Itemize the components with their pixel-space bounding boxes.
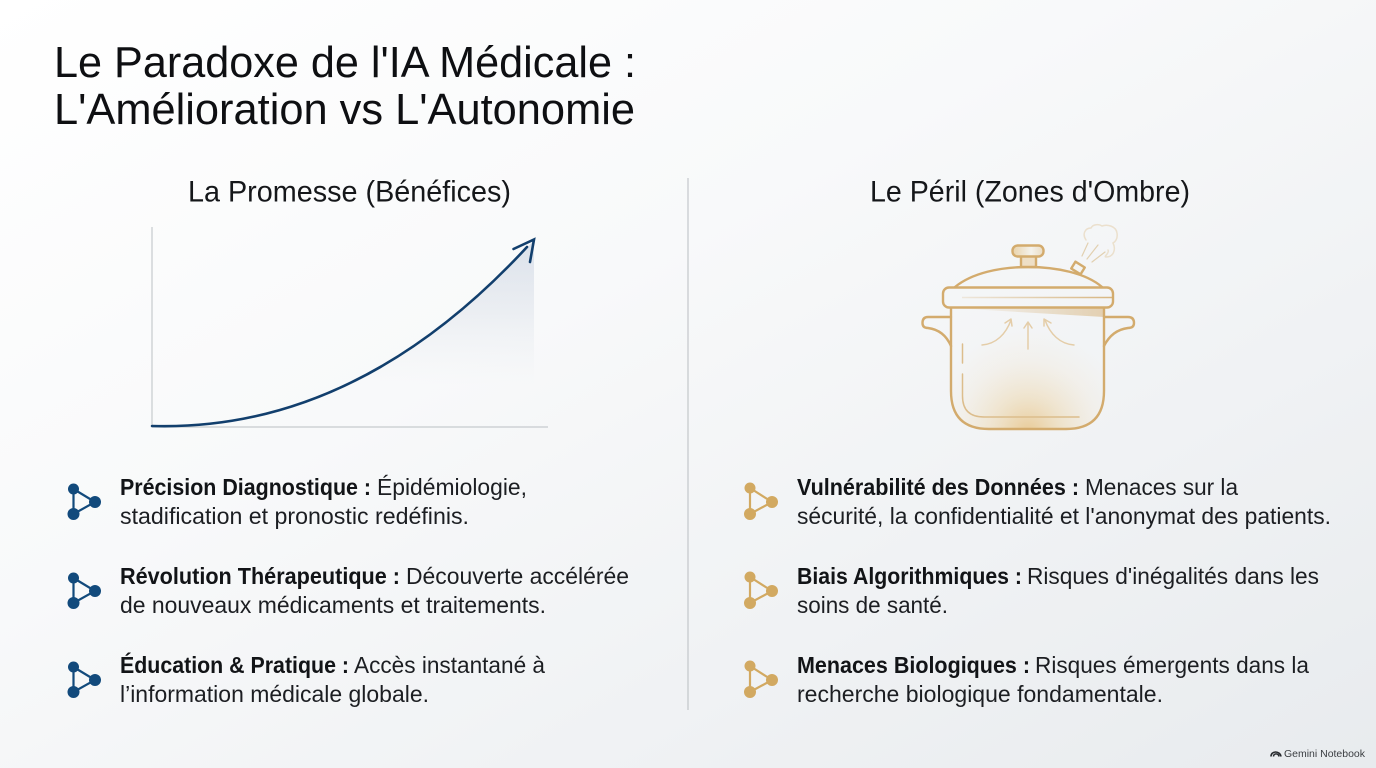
steam xyxy=(1082,225,1117,262)
item: Biais Algorithmiques xyxy=(744,563,1319,618)
text xyxy=(797,652,1309,707)
icon: network nodes xyxy=(68,572,101,609)
list: benefits xyxy=(68,474,629,707)
pot body xyxy=(951,308,1104,429)
text: l’information médicale globale. xyxy=(120,681,429,707)
item: Révolution Thérapeutique xyxy=(68,563,629,618)
item: Précision Diagnostique xyxy=(68,474,527,529)
item: Menaces Biologiques xyxy=(744,652,1309,707)
icon: Gemini Notebook logo xyxy=(1271,752,1281,756)
text xyxy=(797,563,1319,618)
text: recherche biologique fondamentale. xyxy=(797,681,1163,707)
item: Vulnérabilité des Données xyxy=(744,474,1331,529)
icon: network nodes xyxy=(68,484,101,520)
text: Biais Algorithmiques : xyxy=(797,563,1022,589)
text: Menaces sur la xyxy=(1085,474,1238,500)
text: sécurité, la confidentialité et l'anonymat des patients. xyxy=(797,503,1331,529)
icon: network nodes xyxy=(744,572,778,609)
text: Vulnérabilité des Données : xyxy=(797,474,1079,500)
watermark: Gemini Notebook xyxy=(1271,749,1366,760)
text xyxy=(120,651,545,707)
text: Menaces Biologiques : xyxy=(797,652,1030,678)
text: Révolution Thérapeutique : xyxy=(120,563,400,589)
heading: La Promesse: La Promesse (Bénéfices) xyxy=(188,176,511,208)
list: risks xyxy=(744,474,1331,707)
left handle xyxy=(922,317,951,346)
chart: exponential growth curve xyxy=(152,227,548,427)
text xyxy=(797,474,1331,529)
inner heat arrows xyxy=(982,319,1074,349)
lid rim xyxy=(943,288,1113,308)
lid knob xyxy=(1012,246,1044,267)
icon: network nodes xyxy=(68,662,101,698)
icon: network nodes xyxy=(744,482,778,520)
growth curve xyxy=(152,247,527,426)
text: de nouveaux médicaments et traitements. xyxy=(120,592,546,618)
right handle xyxy=(1104,317,1134,346)
heading: Le Péril: Le Péril (Zones d'Ombre) xyxy=(870,176,1190,208)
inner reflection xyxy=(962,344,1079,417)
icon: network nodes xyxy=(744,660,778,698)
text: stadification et pronostic redéfinis. xyxy=(120,503,469,529)
chart area fill xyxy=(300,240,534,400)
center divider xyxy=(687,178,689,710)
text: Précision Diagnostique : xyxy=(120,474,371,500)
rim highlight xyxy=(962,296,1112,298)
text: Découverte accélérée xyxy=(406,563,629,589)
text: soins de santé. xyxy=(797,592,948,618)
text: Risques d'inégalités dans les xyxy=(1027,563,1319,589)
item: Éducation & Pratique xyxy=(68,651,545,707)
chart axes xyxy=(152,227,548,427)
watermark text: Gemini Notebook xyxy=(1284,749,1366,760)
text: Risques émergents dans la xyxy=(1035,652,1309,678)
text xyxy=(120,474,527,529)
growth arrowhead xyxy=(514,240,534,262)
title: L'Amélioration vs L'Autonomie xyxy=(54,85,635,134)
illustration: pressure cooker pot xyxy=(922,225,1134,429)
lid shadow xyxy=(951,308,1104,317)
text: Accès instantané à xyxy=(354,652,545,678)
steam valve xyxy=(1071,262,1085,274)
text: Épidémiologie, xyxy=(377,474,527,500)
title: Le Paradoxe de l'IA Médicale : xyxy=(54,38,636,87)
lid dome xyxy=(955,267,1102,287)
text xyxy=(120,563,629,618)
title xyxy=(54,38,636,134)
pot heat glow xyxy=(956,354,1099,428)
text: Éducation & Pratique : xyxy=(120,651,349,678)
